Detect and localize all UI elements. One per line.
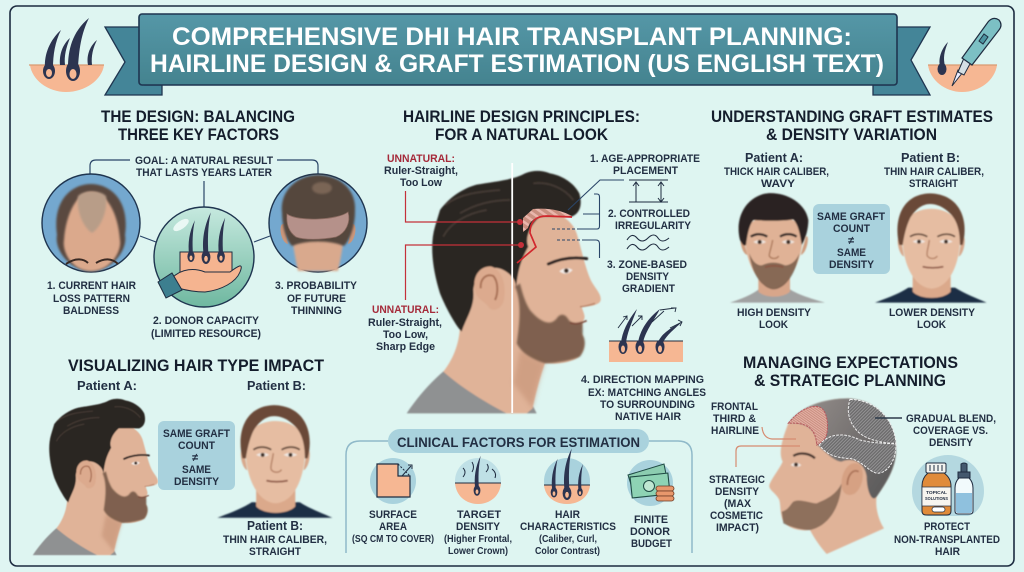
factor labels: HAIR (555, 509, 580, 521)
factor labels: FINITE (634, 514, 668, 526)
gradual blend label: DENSITY (929, 437, 974, 449)
title banner (105, 14, 930, 95)
same graft box (158, 421, 235, 490)
factor labels: Lower Crown) (448, 546, 508, 557)
heading: hairline: FOR A NATURAL LOOK (435, 125, 609, 144)
heading: hairline (403, 107, 640, 144)
density captions: LOOK (759, 319, 788, 331)
same graft box: SAME (182, 464, 211, 476)
patient B text: THIN HAIR CALIBER, (884, 166, 984, 178)
section: hairline principles (368, 107, 706, 423)
patient A text: Patient A: (745, 150, 803, 165)
factor labels: OF FUTURE (287, 293, 346, 305)
same graft box: DENSITY (829, 259, 875, 271)
center profile head photo (407, 163, 601, 413)
protect label: NON-TRANSPLANTED (894, 534, 1000, 546)
section: visualizing hair type impact (33, 356, 332, 558)
factor labels: Color Contrast) (535, 546, 600, 557)
strategic label: (MAX (724, 498, 752, 510)
factor labels: LOSS PATTERN (53, 293, 130, 305)
principle 2: 2. CONTROLLED (608, 208, 690, 220)
heading: graft estimates (711, 107, 993, 144)
protect label (894, 521, 1000, 558)
factor labels: CHARACTERISTICS (520, 521, 616, 533)
frontal zone (788, 406, 828, 445)
banner left ribbon tail (105, 27, 162, 95)
factor labels: DENSITY (456, 521, 501, 533)
patient A text: WAVY (761, 178, 796, 190)
heading: graft estimates: UNDERSTANDING GRAFT ESTIMATES (711, 107, 993, 126)
same graft box (813, 204, 890, 274)
icon: medicine bottles (912, 455, 984, 516)
factor labels: SURFACE (369, 509, 417, 521)
factor labels: BUDGET (631, 538, 672, 550)
unnatural callout bottom (368, 242, 524, 353)
hairline hatching (523, 209, 572, 232)
factor labels: 1. CURRENT HAIR (47, 280, 136, 292)
principle 4 text: EX: MATCHING ANGLES (588, 387, 706, 399)
same graft box: COUNT (178, 440, 215, 452)
factor labels: (LIMITED RESOURCE) (151, 328, 261, 340)
factor labels: 3. PROBABILITY (275, 280, 358, 292)
unnatural callout top: UNNATURAL: (387, 153, 455, 165)
title (150, 23, 884, 78)
unnatural callout top: Ruler-Straight, (384, 165, 458, 177)
gradual blend label: GRADUAL BLEND, (906, 413, 996, 425)
factor labels: (Higher Frontal, (444, 534, 512, 545)
banner main bar (139, 14, 897, 85)
principle 4 text (581, 374, 706, 423)
mid zone (819, 435, 896, 473)
icon: target density (455, 456, 501, 504)
clinical heading pill (388, 429, 649, 453)
heading: graft estimates: & DENSITY VARIATION (766, 125, 937, 144)
principle 3: 3. ZONE-BASED (607, 259, 687, 271)
icon: medicine bottles: TOPICAL (926, 490, 947, 495)
section: managing expectations (709, 353, 1000, 558)
unnatural callout bottom: Sharp Edge (376, 341, 435, 353)
head with zones (769, 398, 896, 554)
clinical heading pill: CLINICAL FACTORS FOR ESTIMATION (397, 434, 640, 450)
icon: hair follicles in skin (29, 18, 104, 92)
same graft box: SAME GRAFT (817, 211, 885, 223)
section: graft estimates (711, 107, 993, 331)
strategic label: DENSITY (715, 486, 760, 498)
patient B caption: STRAIGHT (249, 546, 301, 558)
icon: surface area (370, 458, 416, 504)
icon: medicine bottles: SOLUTIONS (925, 496, 948, 501)
patient B text (884, 150, 984, 190)
heading: managing: MANAGING EXPECTATIONS (743, 353, 958, 372)
patient labels (77, 378, 306, 393)
factor labels: DONOR (630, 526, 670, 538)
section: clinical factors (346, 429, 692, 557)
factor labels: TARGET (457, 509, 501, 521)
goal connector lines (90, 160, 318, 242)
gradual blend label: COVERAGE VS. (913, 425, 988, 437)
heading: the design: THREE KEY FACTORS (118, 125, 279, 144)
patient A text (724, 150, 829, 190)
title: HAIRLINE DESIGN & GRAFT ESTIMATION (US ENGLISH TEXT) (150, 50, 884, 78)
protect label: HAIR (935, 546, 960, 558)
principle 3: DENSITY (626, 271, 670, 283)
goal text (135, 155, 273, 179)
factor labels: 2. DONOR CAPACITY (153, 315, 260, 327)
principle 4: direction mapping icon (609, 308, 683, 362)
unnatural callout bottom: Ruler-Straight, (368, 317, 442, 329)
same graft box: ≠ (192, 452, 198, 464)
factor labels: (SQ CM TO COVER) (352, 534, 434, 545)
strategic label: IMPACT) (716, 522, 759, 534)
circle 3: donor area photo (269, 174, 367, 272)
factor labels: THINNING (291, 305, 342, 317)
same graft box: SAME (837, 247, 866, 259)
same graft box: SAME GRAFT (163, 428, 230, 440)
patient A text: THICK HAIR CALIBER, (724, 166, 829, 178)
principle 1 (568, 153, 700, 210)
factor labels: AREA (379, 521, 407, 533)
frontal label: THIRD & (713, 413, 756, 425)
patient B caption (223, 518, 327, 558)
gradual blend label (875, 413, 996, 449)
patient B front photo (875, 193, 987, 303)
circle 1: balding crown photo (42, 174, 140, 272)
goal text: GOAL: A NATURAL RESULT (135, 155, 273, 167)
patient B front photo (217, 405, 332, 518)
heading: managing (743, 353, 958, 390)
heading: the design: THE DESIGN: BALANCING (101, 107, 295, 126)
same graft box: COUNT (833, 223, 870, 235)
goal text: THAT LASTS YEARS LATER (136, 167, 272, 179)
factor labels (47, 280, 358, 340)
principle 4 text: 4. DIRECTION MAPPING (581, 374, 704, 386)
heading: visualizing: VISUALIZING HAIR TYPE IMPACT (68, 356, 325, 375)
unnatural callout top (384, 153, 523, 225)
frontal label (711, 401, 796, 439)
principle 4 text: NATIVE HAIR (615, 411, 681, 423)
patient B caption: Patient B: (247, 518, 303, 533)
patient B text: STRAIGHT (909, 178, 958, 190)
same graft box: ≠ (848, 235, 854, 247)
frontal label: FRONTAL (711, 401, 758, 413)
principle 4 text: TO SURROUNDING (600, 399, 695, 411)
density captions: LOWER DENSITY (889, 307, 976, 319)
section: the design (42, 107, 367, 340)
patient B text: Patient B: (901, 150, 960, 165)
principle 2: IRREGULARITY (615, 220, 692, 232)
patient B caption: THIN HAIR CALIBER, (223, 534, 327, 546)
strategic label (709, 446, 800, 534)
strategic label: STRATEGIC (709, 474, 765, 486)
frontal label: HAIRLINE (711, 425, 759, 437)
heading: the design (101, 107, 295, 144)
density captions: HIGH DENSITY (737, 307, 812, 319)
title: COMPREHENSIVE DHI HAIR TRANSPLANT PLANNING: (172, 23, 852, 51)
principle 1: 1. AGE-APPROPRIATE (590, 153, 700, 165)
principle 1: PLACEMENT (613, 165, 678, 177)
heading: managing: & STRATEGIC PLANNING (754, 371, 946, 390)
banner right ribbon tail (873, 27, 930, 95)
factor labels (352, 509, 672, 557)
icon: implanter pen (928, 18, 1001, 92)
patient labels: Patient B: (247, 378, 306, 393)
principle 2 (552, 194, 692, 250)
density captions: LOOK (917, 319, 946, 331)
split divider (511, 163, 513, 413)
crown zone (848, 399, 896, 443)
panel outline (346, 441, 692, 553)
density captions (737, 307, 976, 331)
red hairline (517, 216, 572, 263)
principle 3: GRADIENT (622, 283, 675, 295)
strategic label: COSMETIC (710, 510, 763, 522)
icon: donor budget (627, 460, 674, 506)
protect label: PROTECT (924, 521, 970, 533)
unnatural callout bottom: UNNATURAL: (372, 304, 439, 316)
unnatural callout bottom: Too Low, (383, 329, 428, 341)
heading: hairline: HAIRLINE DESIGN PRINCIPLES: (403, 107, 640, 126)
same graft box: DENSITY (174, 476, 220, 488)
patient A front photo (730, 193, 825, 303)
patient labels: Patient A: (77, 378, 137, 393)
principle 3 (557, 240, 687, 295)
patient A profile photo (33, 399, 158, 555)
factor labels: BALDNESS (63, 305, 119, 317)
unnatural callout top: Too Low (400, 177, 442, 189)
circle 2: donor capacity hand (154, 207, 254, 307)
icon: hair characteristics (544, 448, 590, 504)
factor labels: (Caliber, Curl, (539, 534, 597, 545)
